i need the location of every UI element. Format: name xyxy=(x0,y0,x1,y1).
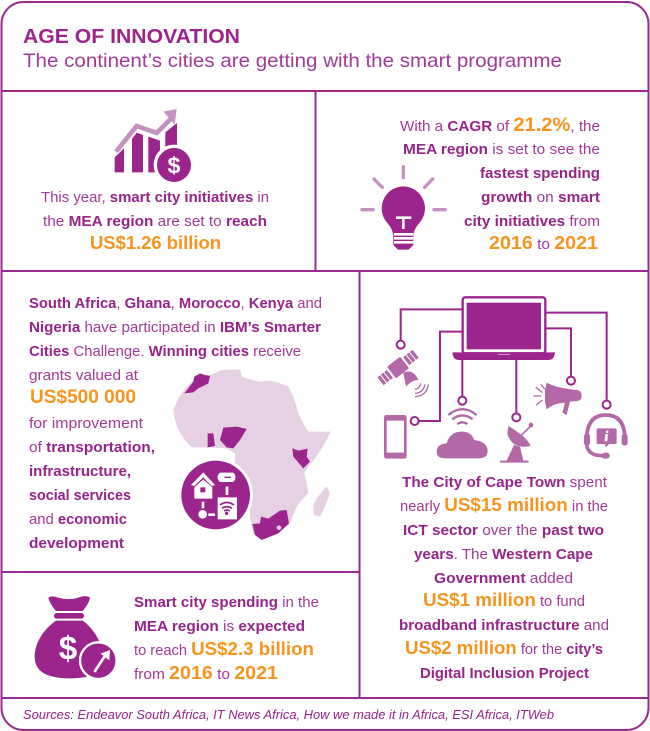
text: spending expected: to reach US$2.3 billion xyxy=(134,638,314,659)
text: Cape Town spend: Government added xyxy=(434,571,573,587)
text: Smarter Cities challenge: for improvement xyxy=(29,416,143,432)
satellite xyxy=(376,348,420,387)
text: spending forecast xyxy=(41,190,269,253)
panel: Cape Town ICT xyxy=(376,297,628,682)
text: Smarter Cities challenge: social services xyxy=(29,488,131,504)
text: CAGR statement: city initiatives from xyxy=(464,214,600,230)
text: spending forecast: US$1.26 billion xyxy=(90,232,221,253)
text: Cape Town spend: US$1 million to fund xyxy=(423,589,585,610)
icon: money bag with arrow: $ xyxy=(59,631,78,668)
text: Cape Town spend xyxy=(399,475,609,682)
text: Cape Town spend: broadband infrastructure and xyxy=(399,618,609,634)
text: Smarter Cities challenge: US$500 000 xyxy=(30,387,136,408)
text: spending expected: MEA region is expected xyxy=(134,619,305,635)
icon: rising bar chart with dollar xyxy=(115,109,193,184)
title xyxy=(23,26,562,72)
wifi and cloud xyxy=(448,409,477,424)
text: spending expected: from 2016 to 2021 xyxy=(134,662,278,683)
panel: smart city spending xyxy=(35,595,319,683)
text: CAGR statement xyxy=(400,115,600,253)
satellite dish xyxy=(507,426,531,447)
text: Smarter Cities challenge: of transportation, xyxy=(29,440,155,456)
text: Cape Town spend: ICT sector over the past two xyxy=(403,523,604,539)
icon: rising bar chart with dollar: $ xyxy=(167,153,180,179)
icon: map of Africa xyxy=(173,369,331,540)
heading: AGE OF INNOVATION xyxy=(23,26,240,48)
text: Smarter Cities challenge: Nigeria have participated in IBM’s Smarter xyxy=(29,320,321,336)
panel: CAGR growth xyxy=(362,115,600,253)
text: Smarter Cities challenge: grants valued at xyxy=(29,368,138,384)
text: Smarter Cities challenge: South Africa, Ghana, Morocco, Kenya and xyxy=(29,296,322,312)
smartphone xyxy=(384,415,407,459)
highlighted countries xyxy=(184,373,310,540)
text: Smarter Cities challenge: Cities Challenge. Winning cities receive xyxy=(29,344,301,360)
connector lines xyxy=(397,309,611,425)
text: Cape Town spend: nearly US$15 million in the xyxy=(400,494,608,515)
text: Smarter Cities challenge: and economic xyxy=(29,512,127,528)
text: spending expected xyxy=(134,595,319,683)
text: CAGR statement: With a CAGR of 21.2%, the xyxy=(400,115,600,136)
text: Smarter Cities challenge xyxy=(29,296,322,552)
text: CAGR statement: MEA region is set to see the xyxy=(403,142,600,158)
text: spending forecast: This year, smart city initiatives in xyxy=(41,190,269,206)
text: Cape Town spend: The City of Cape Town spent xyxy=(402,475,607,491)
text: CAGR statement: fastest spending xyxy=(480,166,600,182)
icon: connected devices network xyxy=(376,297,628,463)
panel: IBM Smarter Cities xyxy=(29,296,331,552)
panel: this year spending xyxy=(41,109,269,253)
text: spending forecast: the MEA region are set to reach xyxy=(43,214,267,230)
text: Cape Town spend: Digital Inclusion Project xyxy=(420,666,589,682)
megaphone xyxy=(545,383,582,415)
headset xyxy=(587,415,625,456)
laptop xyxy=(463,297,545,353)
text: Cape Town spend: US$2 million for the city’s xyxy=(405,637,603,658)
subheading: The continent’s cities are getting with the smart programme xyxy=(23,50,562,72)
icon: light bulb xyxy=(362,167,445,250)
text: Cape Town spend: years. The Western Cape xyxy=(414,547,593,563)
icon: money bag with arrow xyxy=(35,596,117,679)
text: spending expected: Smart city spending in the xyxy=(134,595,319,611)
text: Smarter Cities challenge: development xyxy=(29,536,124,552)
sources footer: Sources: Endeavor South Africa, IT News Africa, How we made it in Africa, ESI Africa, ITWeb xyxy=(23,707,554,722)
text: CAGR statement: growth on smart xyxy=(481,190,600,206)
text: CAGR statement: 2016 to 2021 xyxy=(489,232,598,253)
text: Smarter Cities challenge: infrastructure, xyxy=(29,464,131,480)
